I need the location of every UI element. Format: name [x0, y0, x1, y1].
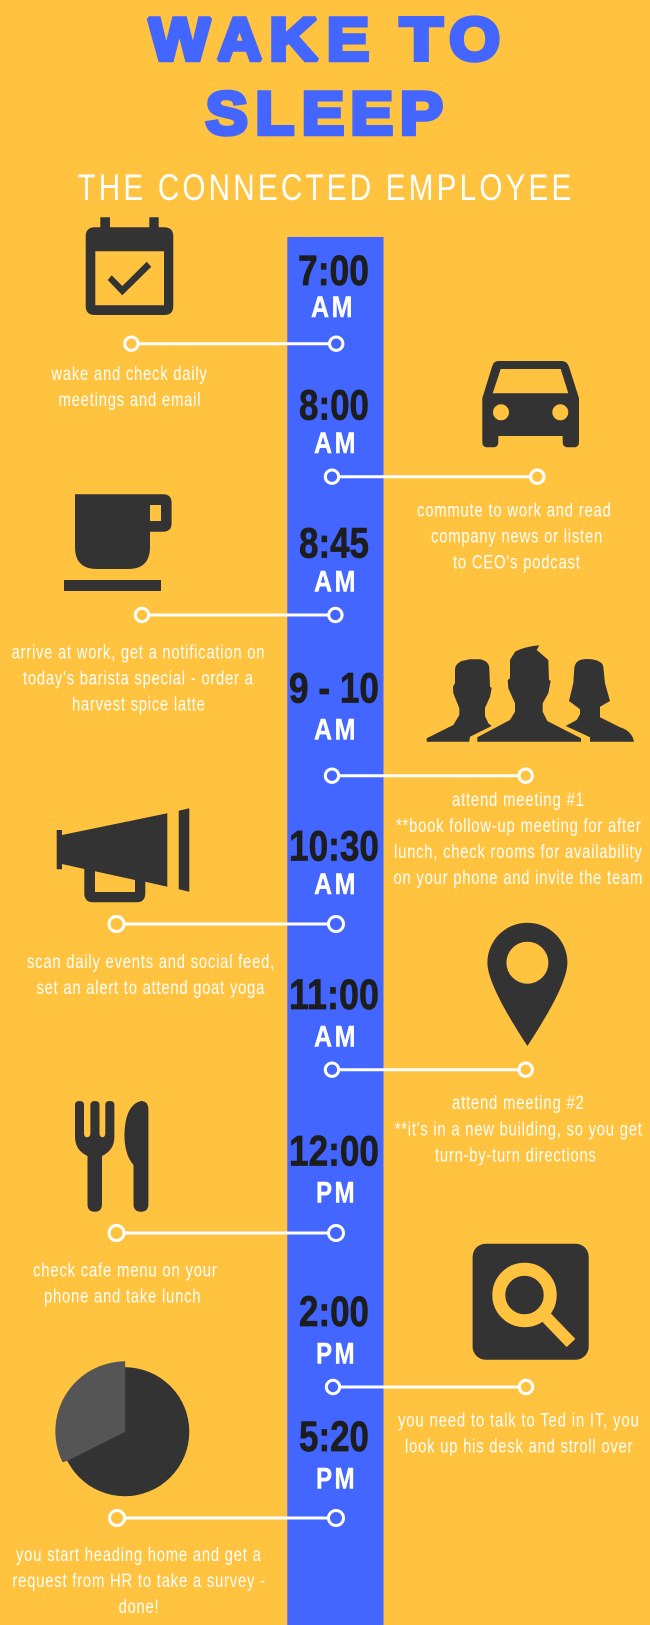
- title: T: [400, 6, 442, 73]
- time: 5:20 PM: 5:20: [299, 1413, 369, 1461]
- text: meeting 2: [395, 1093, 643, 1166]
- time: 8:00 AM: [299, 382, 369, 460]
- connector: [325, 769, 532, 782]
- icon: fork and knife: [75, 1101, 148, 1212]
- text: commute: company news or listen: [431, 527, 603, 548]
- time: 12:00 PM: PM: [316, 1177, 357, 1210]
- text: meeting 1: [394, 790, 643, 889]
- title: E: [327, 6, 369, 73]
- time: 8:45 AM: 8:45: [299, 519, 369, 567]
- icon: search: [473, 1244, 589, 1360]
- text: scan: set an alert to attend goat yoga: [36, 978, 265, 999]
- time: 12:00 PM: 12:00: [289, 1128, 379, 1176]
- title: A: [217, 6, 262, 73]
- text: scan: scan daily events and social feed,: [27, 952, 275, 973]
- title: K: [269, 6, 318, 73]
- icon: calendar: [86, 217, 173, 315]
- icon: three people: [427, 645, 634, 742]
- time: 2:00 PM: PM: [316, 1337, 357, 1370]
- entry: 8:00 AM: [299, 361, 612, 574]
- text: commute: to CEO's podcast: [453, 553, 581, 574]
- time: 2:00 PM: 2:00: [299, 1288, 369, 1336]
- connector: [325, 1063, 532, 1076]
- connector: [109, 916, 344, 932]
- time: 10:30 AM: 10:30: [289, 823, 379, 871]
- text: arrive: harvest spice latte: [72, 694, 206, 715]
- time: 11:00 AM: 11:00: [289, 971, 379, 1019]
- time: 8:00 AM: 8:00: [299, 382, 369, 430]
- title: O: [449, 6, 500, 73]
- connector: [125, 337, 343, 350]
- text: Ted in IT: [398, 1411, 640, 1458]
- time: 12:00 PM: [289, 1128, 379, 1210]
- entry: 2:00 PM: [299, 1244, 640, 1458]
- text: meeting 1: attend meeting #1: [452, 790, 585, 811]
- text: arrive: today's barista special - order a: [23, 668, 254, 689]
- connector: [325, 470, 544, 483]
- text: lunch: phone and take lunch: [44, 1286, 201, 1307]
- text: arrive: arrive at work, get a notification on: [12, 642, 265, 663]
- text: meeting 2: attend meeting #2: [452, 1093, 585, 1114]
- time: 9 - 10 AM: [289, 664, 379, 746]
- title: [149, 6, 500, 147]
- time: 9 - 10 AM: 9 - 10: [289, 664, 379, 712]
- time: 7:00 AM: 7:00: [298, 247, 369, 295]
- time: 2:00 PM: [299, 1288, 369, 1370]
- text: lunch: check cafe menu on your: [33, 1260, 218, 1281]
- entry: 5:20 PM: [12, 1361, 369, 1618]
- text: survey: done!: [119, 1597, 159, 1618]
- icon: coffee cup: [64, 494, 172, 591]
- time: 8:00 AM: AM: [314, 427, 358, 460]
- time: 5:20 PM: [299, 1413, 369, 1495]
- text: wake: wake and check daily: [51, 364, 208, 385]
- time: 10:30 AM: AM: [314, 868, 358, 901]
- title: E: [351, 80, 393, 147]
- time: 5:20 PM: PM: [316, 1462, 357, 1495]
- text: survey: you start heading home and get a: [16, 1545, 262, 1566]
- timeline bar: [287, 237, 384, 1625]
- time: 11:00 AM: AM: [314, 1021, 358, 1054]
- entry: 11:00 AM: [289, 923, 643, 1166]
- text: wake: [51, 364, 208, 411]
- title: L: [256, 80, 294, 147]
- icon: megaphone: [57, 808, 189, 902]
- connector: [326, 1380, 533, 1394]
- text: arrive: [12, 642, 265, 715]
- time: 11:00 AM: [289, 971, 379, 1054]
- title: S: [206, 80, 248, 147]
- icon: pie chart: [55, 1361, 189, 1496]
- text: survey: [12, 1545, 266, 1618]
- title: P: [400, 80, 443, 147]
- entry: 10:30 AM: [27, 808, 379, 999]
- connector: [109, 1226, 344, 1240]
- entry: 7:00 AM: [51, 217, 369, 411]
- connector: [135, 608, 342, 622]
- entry: 12:00 PM: [33, 1101, 379, 1307]
- time: 8:45 AM: [299, 519, 369, 598]
- time: 10:30 AM: [289, 823, 379, 901]
- text: scan: [27, 952, 275, 999]
- time: 7:00 AM: [298, 247, 369, 324]
- title: W: [149, 6, 210, 73]
- text: lunch: [33, 1260, 218, 1307]
- time: 8:45 AM: AM: [314, 565, 358, 598]
- text: commute: [417, 501, 612, 574]
- connector: [110, 1510, 344, 1526]
- icon: map pin: [487, 923, 567, 1046]
- text: survey: request from HR to take a survey -: [12, 1571, 266, 1592]
- title: E: [302, 80, 344, 147]
- time: 7:00 AM: AM: [311, 291, 355, 324]
- time: 9 - 10 AM: AM: [314, 713, 358, 746]
- text: meeting 2: turn-by-turn directions: [435, 1145, 597, 1166]
- text: wake: meetings and email: [58, 390, 201, 411]
- entry: 8:45 AM: [12, 494, 369, 715]
- entry: 9 - 10 AM: [289, 645, 643, 889]
- icon: car: [482, 361, 579, 447]
